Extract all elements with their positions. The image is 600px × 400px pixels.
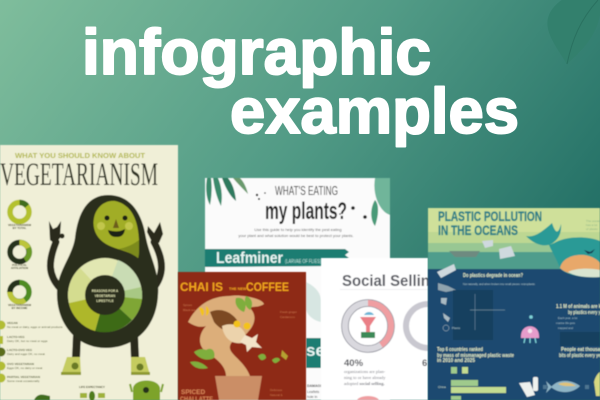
panel label — [180, 389, 214, 400]
sky note: The ocean — [586, 219, 600, 223]
stat text: ning to or have already — [344, 375, 386, 380]
arms and legs — [50, 242, 161, 358]
body text: hole in — [307, 395, 317, 399]
hands — [49, 221, 163, 244]
side notes: Natural & — [270, 393, 283, 397]
panel: vegetarianism — [0, 145, 178, 400]
donut chart: reasons: VEGETARIAN — [95, 294, 116, 298]
body text: DAMAGE — [307, 384, 323, 388]
leafminer band — [205, 249, 349, 267]
intro text: Use this guide to help you identify the pest eating — [254, 227, 342, 232]
mascot: avocado — [34, 195, 163, 400]
mascot at bottom — [130, 380, 163, 400]
countries heading — [437, 347, 514, 364]
bar chart — [438, 367, 506, 400]
body — [57, 195, 158, 348]
side notes: Spices — [183, 303, 193, 307]
donut chart: reasons: REASONS FOR A — [92, 289, 119, 293]
silhouette shadows — [560, 332, 600, 346]
diet type list: Some meat occasionally — [7, 379, 40, 383]
leafminer band: (LARVAE OF FLIES) — [285, 259, 321, 265]
ink splatter — [256, 192, 367, 219]
diet type list: OVO VEGETARIAN — [7, 362, 34, 366]
donut labels — [8, 223, 32, 310]
animals note — [556, 316, 578, 330]
stat text — [344, 369, 386, 386]
plastic eating note — [559, 347, 600, 359]
depth chart — [443, 290, 505, 340]
diet type list: LACTO-OVO VEG — [7, 348, 33, 352]
donut chart 40% — [345, 303, 391, 349]
life expectancy block — [79, 385, 105, 400]
shoes — [61, 357, 150, 375]
animals note: Each year, a lot — [558, 316, 578, 320]
leaves left — [206, 178, 248, 206]
donut chart: reasons — [68, 258, 142, 332]
donut labels: BY INCOME — [12, 306, 28, 310]
side notes: Black tea — [183, 308, 196, 312]
diet type list: PARTIAL VEGETARIAN — [7, 375, 40, 379]
donut labels: VEGETARIANISM — [8, 303, 32, 307]
fish — [546, 381, 580, 393]
life expectancy block: LIFE EXPECTANCY — [79, 385, 105, 389]
panel: social selling — [321, 258, 439, 400]
small plant — [34, 395, 50, 400]
panel title: VEGETARIANISM — [0, 157, 158, 193]
sky note — [586, 219, 600, 231]
boat — [449, 251, 480, 257]
degrade question: Do plastics degrade in ocean? — [463, 273, 523, 279]
panel title: my plants? — [265, 198, 347, 225]
animals note: trapped and — [558, 326, 573, 330]
panel title: CHAI IS — [180, 282, 223, 294]
title: examples — [230, 75, 519, 147]
panel title: Social Selling — [342, 273, 439, 290]
diet type list: No meat or dairy, eggs or animal products — [7, 325, 63, 329]
donut chart: reasons: LIFESTYLE — [96, 299, 114, 303]
degrade question: Not naturally, and when broken into small pieces: microplastic — [463, 282, 535, 286]
title — [82, 16, 519, 147]
section band — [306, 338, 334, 368]
body text: Leaflets — [307, 390, 320, 394]
the new: THE NEW — [229, 287, 247, 291]
panel: chai: COFFEE — [246, 282, 289, 294]
diet type list: VEGAN — [7, 321, 18, 325]
second donut — [403, 301, 428, 351]
animals note: marine life gets — [556, 321, 576, 325]
stat text: adopted social selling. — [344, 381, 385, 386]
chai splash illustration — [188, 295, 288, 376]
donut charts — [10, 202, 29, 302]
icon: corner leaf — [547, 0, 600, 64]
panel: plastic pollution — [428, 208, 600, 400]
sky note: has a lot — [586, 223, 598, 227]
side notes: Cardamom — [280, 315, 295, 319]
panel title: IN THE OCEANS — [438, 222, 518, 238]
body text — [307, 384, 323, 399]
equals — [543, 385, 589, 389]
diet type list: Eggs OK, no dairy or meat — [7, 366, 43, 370]
stat text: organizations are plan- — [344, 369, 386, 374]
stat 60%: 6 — [422, 358, 427, 369]
intro text — [238, 227, 354, 238]
animals stat — [556, 304, 600, 316]
countries heading: Top 6 countries ranked — [437, 347, 483, 353]
donut labels: VEGETARIANISM — [8, 223, 32, 227]
section band: sec — [306, 341, 334, 360]
diet type list — [0, 320, 63, 383]
chai glass — [215, 376, 262, 400]
panel title — [438, 208, 542, 238]
funnel icon — [360, 312, 376, 338]
panel label: SPICED — [181, 389, 206, 396]
depth chart: Plastic — [452, 326, 461, 330]
degrade question — [463, 273, 535, 286]
side notes — [183, 303, 297, 397]
stat 40%: 40% — [344, 358, 364, 369]
panel: plants — [205, 178, 390, 400]
donut labels: BY TOTAL — [13, 226, 27, 230]
plastic trash — [437, 240, 515, 322]
plastic bag and bottle — [519, 377, 538, 397]
panel title: PLASTIC POLLUTION — [438, 208, 542, 224]
leaves right — [371, 178, 390, 226]
side notes: Delicious — [270, 388, 283, 392]
diet type list: LACTO-VEG — [7, 335, 25, 339]
panel heading: WHAT'S EATING — [275, 183, 338, 198]
third icon — [357, 396, 379, 400]
whale — [526, 223, 600, 277]
jellyfish — [521, 315, 539, 343]
countries heading: in 2010 and 2025 — [437, 358, 475, 364]
diet type list: Dairy and eggs OK, no meat — [7, 352, 45, 356]
leaf sketch — [306, 282, 321, 322]
sky note: of plastic — [586, 227, 598, 231]
donut labels: POLITICAL — [12, 263, 27, 267]
person icon — [594, 372, 600, 396]
diet type list: Dairy OK, but no meat or eggs — [7, 339, 48, 343]
face — [94, 201, 139, 258]
side notes: Fresh ginger — [280, 310, 297, 314]
panel heading: WHAT YOU SHOULD KNOW ABOUT — [15, 153, 146, 160]
panel: chai — [178, 272, 306, 400]
leafminer band: Leafminer — [216, 250, 283, 267]
title: infographic — [82, 16, 431, 88]
donut labels: AFFILIATION — [11, 266, 28, 270]
intro text: your plant and what solution would be best to protect your plants. — [238, 233, 354, 238]
bar chart: China — [438, 385, 446, 389]
countries heading: by mass of mismanaged plastic waste — [437, 353, 514, 359]
